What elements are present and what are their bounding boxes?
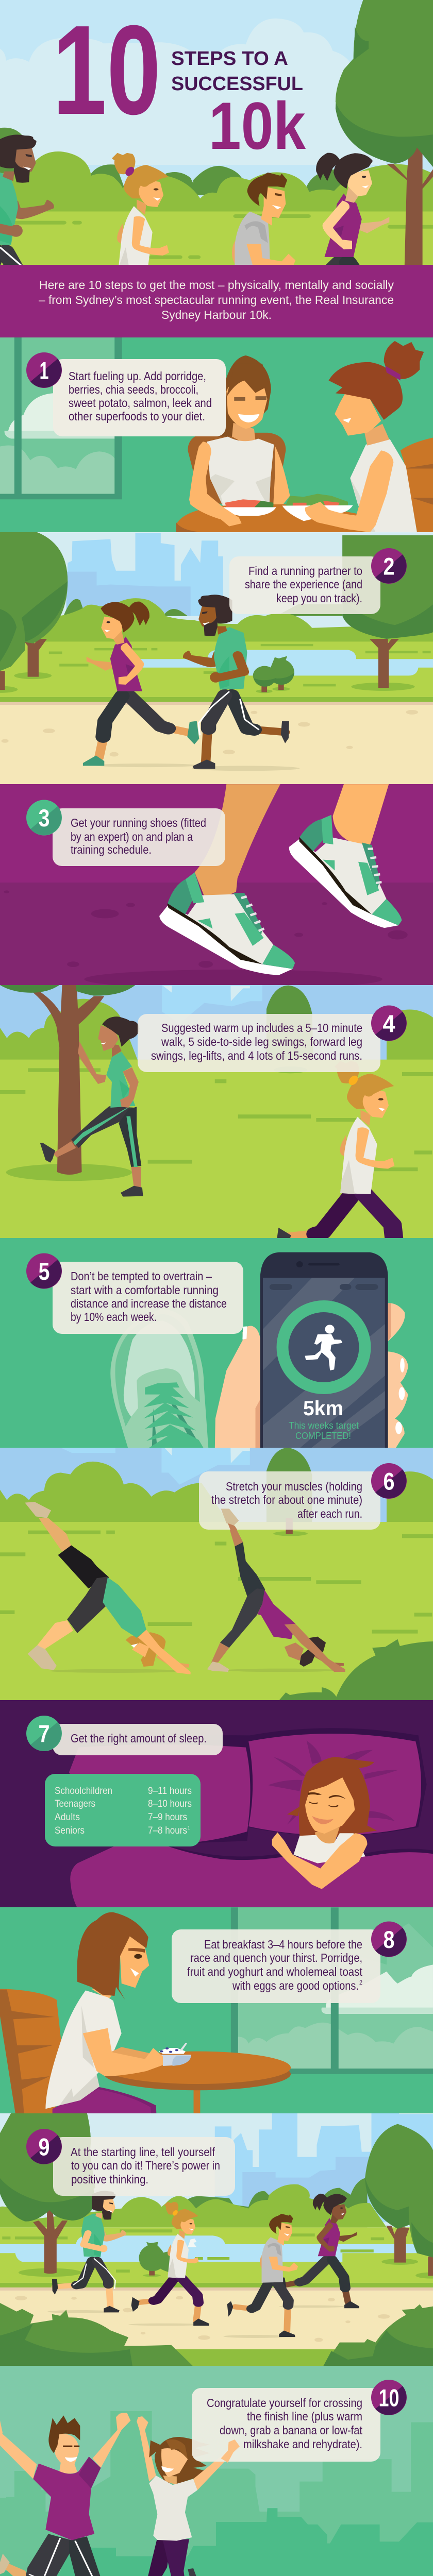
badge: 6 xyxy=(371,1463,407,1499)
table: sleep hours: Seniors xyxy=(55,1825,85,1836)
icon: small bushes xyxy=(139,2242,174,2277)
progress ring xyxy=(282,1307,365,1388)
runner: blonde woman xyxy=(131,2202,209,2326)
badge: 8 xyxy=(371,1922,407,1957)
callout: step 4: swings, leg-lifts, and 4 lots of 15-second runs. xyxy=(151,1049,362,1062)
callout: step 2: share the experience (and xyxy=(245,578,362,591)
callout: step 7 xyxy=(53,1724,223,1755)
table: sleep hours xyxy=(45,1774,201,1846)
panel: step 6 stretching xyxy=(0,1448,433,1701)
icon: right tree xyxy=(342,535,433,691)
illustration: two women eating xyxy=(176,341,433,532)
title: big 10: 10 xyxy=(53,0,161,141)
callout: step 4: walk, 5 side-to-side leg swings, forward leg xyxy=(161,1035,362,1048)
panel: step 1 fuel up xyxy=(0,337,433,532)
callout: step 2 xyxy=(229,556,380,614)
illustration: woman at breakfast table xyxy=(0,1912,291,2124)
callout: step 5: start with a comfortable running xyxy=(71,1283,219,1297)
callout: step 9: At the starting line, tell yourself xyxy=(71,2145,215,2159)
callout: step 8: Eat breakfast 3–4 hours before the xyxy=(204,1938,362,1951)
person: jumping man xyxy=(0,2413,130,2576)
shadows on path xyxy=(95,764,299,771)
callout: step 9: positive thinking. xyxy=(71,2173,148,2186)
table: sleep hours: Teenagers xyxy=(55,1799,95,1809)
illustration: phone xyxy=(260,1252,388,1449)
table: sleep hours: 7–9 hours xyxy=(148,1812,187,1823)
callout: step 4: Suggested warm up includes a 5–10 minute xyxy=(161,1021,362,1035)
panel: intro band xyxy=(0,265,433,337)
city skyline and park xyxy=(37,532,433,642)
illustration: hand holding phone xyxy=(215,1303,408,1449)
callout: step 9: to you can do it! There’s power in xyxy=(71,2159,220,2172)
callout: step 1: Start fueling up. Add porridge, xyxy=(69,369,206,383)
callout: step 1: berries, chia seeds, broccoli, xyxy=(69,383,198,396)
callout: step 10: down, grab a banana or low-fat xyxy=(220,2424,363,2437)
badge: 1: 1 xyxy=(39,357,48,384)
window with clouds xyxy=(0,337,122,499)
callout: step 8: fruit and yoghurt and wholemeal toast xyxy=(187,1965,363,1978)
badge: 5 xyxy=(26,1253,62,1289)
icon: swan xyxy=(188,2239,196,2247)
title: 10k: 10k xyxy=(209,88,306,163)
callout: step 5: Don’t be tempted to overtrain – xyxy=(71,1269,212,1283)
badge: 6: 6 xyxy=(384,1467,395,1495)
callout: step 1 xyxy=(53,359,226,436)
callout: step 6: after each run. xyxy=(297,1507,362,1520)
icon: large tree xyxy=(336,0,433,265)
intro text: Here are 10 steps to get the most – physically, mentally and socially xyxy=(39,278,394,292)
badge: 4 xyxy=(371,1006,407,1041)
panel: hero header xyxy=(0,0,433,265)
park background xyxy=(0,2113,433,2366)
ground texture xyxy=(4,890,408,989)
illustration: shoe from above xyxy=(110,1310,208,1449)
table: sleep hours: 1 xyxy=(188,1825,190,1831)
panel: step 7 sleep xyxy=(0,1700,433,1908)
icon: small bushes xyxy=(253,656,294,693)
intro text: – from Sydney’s most spectacular running event, the Real Insurance xyxy=(39,293,394,307)
runner: woman in purple xyxy=(316,152,390,265)
badge: 7: 7 xyxy=(38,1720,49,1748)
runner: man in grey xyxy=(232,172,296,265)
callout: step 10: Congratulate yourself for crossing xyxy=(207,2396,362,2410)
runner: bearded man xyxy=(0,134,54,265)
badge: 2 xyxy=(371,548,407,584)
intro text xyxy=(39,278,394,321)
callout: step 2: Find a running partner to xyxy=(248,564,362,578)
callout: step 10: the finish line (plus warm xyxy=(247,2410,362,2423)
runner: bearded man xyxy=(52,2191,126,2312)
runner: man in grey xyxy=(227,2214,298,2337)
callout: step 8: race and quench your thirst. Porridge, xyxy=(190,1951,362,1964)
callout: step 3: by an expert) on and plan a xyxy=(71,830,193,843)
badge: 2: 2 xyxy=(384,552,395,580)
panel: step 10 celebrate xyxy=(0,2366,433,2576)
panel: step 2 running partner xyxy=(0,531,433,784)
callout: step 1: sweet potato, salmon, leek and xyxy=(69,396,212,410)
badge: 10 xyxy=(371,2380,407,2415)
illustration: bed and sleeping woman xyxy=(69,1728,433,1908)
illustration: legs and running shoes xyxy=(159,784,423,975)
callout: step 5: distance and increase the distance xyxy=(71,1297,227,1310)
text: target: This weeks target xyxy=(289,1420,359,1431)
badge: 1 xyxy=(26,352,62,388)
table: sleep hours: 9–11 hours xyxy=(148,1786,192,1797)
panel: step 9 starting line xyxy=(0,2113,433,2366)
callout: step 3: training schedule. xyxy=(71,843,152,856)
badge: 9: 9 xyxy=(38,2133,49,2161)
callout: step 8: 2 xyxy=(359,1979,362,1986)
callout: step 5 xyxy=(53,1262,243,1334)
title: steps to a: STEPS TO A xyxy=(171,48,288,70)
callout: step 3 xyxy=(53,808,225,866)
panel: step 3 running shoes xyxy=(0,784,433,989)
icon: left trees xyxy=(0,531,68,693)
ground and path xyxy=(0,639,433,784)
badge: 9 xyxy=(26,2129,62,2164)
badge: 5: 5 xyxy=(38,1258,49,1285)
callout: step 2: keep you on track). xyxy=(276,591,362,605)
badge: 4: 4 xyxy=(382,1010,395,1037)
callout: step 6: Stretch your muscles (holding xyxy=(226,1480,362,1493)
runner: man xyxy=(183,595,289,769)
text: completed: COMPLETED! xyxy=(295,1431,351,1441)
window with clouds xyxy=(231,1907,433,2074)
callout: step 9 xyxy=(53,2137,235,2196)
callout: step 3: Get your running shoes (fitted xyxy=(71,816,206,829)
callout: step 8: with eggs are good options. xyxy=(232,1979,359,1992)
panel: step 4 warm up xyxy=(0,985,433,1238)
icon: right trees xyxy=(365,2124,433,2279)
callout: step 1: other superfoods to your diet. xyxy=(69,410,205,423)
person: jumping woman xyxy=(137,2416,240,2576)
table: sleep hours: 7–8 hours xyxy=(148,1825,187,1836)
intro text: Sydney Harbour 10k. xyxy=(161,308,272,321)
callout: step 8 xyxy=(172,1929,380,2003)
icon: tree xyxy=(0,985,135,1175)
woman's raised hand over callout xyxy=(221,2439,240,2463)
icon: runner xyxy=(305,1325,342,1370)
raised foot over callout xyxy=(221,1509,239,1530)
panel: step 8 breakfast xyxy=(0,1907,433,2124)
skyline xyxy=(0,2411,433,2576)
runner: woman in purple xyxy=(278,2194,359,2308)
runner: woman xyxy=(83,602,199,766)
foreground bushes xyxy=(0,2303,433,2366)
park background xyxy=(0,1448,433,1701)
person: woman stretching against tree xyxy=(40,1016,143,1197)
panel: step 5 don't overtrain xyxy=(0,1238,433,1449)
table: sleep hours: Schoolchildren xyxy=(55,1786,112,1797)
callout: step 6: the stretch for about one minute) xyxy=(211,1493,362,1506)
text: 5km: 5km xyxy=(303,1397,343,1420)
person: blonde runner xyxy=(277,1072,403,1238)
title: successful: SUCCESSFUL xyxy=(171,73,303,95)
badge: 7 xyxy=(26,1716,62,1751)
callout: step 4 xyxy=(138,1014,380,1072)
icon: left tree xyxy=(0,2113,95,2277)
person: woman in downward dog xyxy=(207,1509,345,1672)
badge: 8: 8 xyxy=(384,1926,395,1953)
callout: step 10 xyxy=(192,2388,380,2462)
callout: step 10: milkshake and rehydrate). xyxy=(243,2437,362,2451)
badge: 3 xyxy=(26,800,62,836)
runner: blonde woman xyxy=(112,152,169,265)
table: sleep hours: Adults xyxy=(55,1812,80,1823)
callout: step 5: by 10% each week. xyxy=(71,1310,157,1324)
callout: step 6 xyxy=(199,1471,380,1530)
badge: 3: 3 xyxy=(38,804,49,832)
hero park scene xyxy=(0,0,433,265)
park background xyxy=(0,985,433,1238)
table: sleep hours: 8–10 hours xyxy=(148,1799,192,1809)
person: man in downward dog xyxy=(25,1502,191,1674)
callout: step 7: Get the right amount of sleep. xyxy=(71,1732,207,1745)
badge: 10: 10 xyxy=(378,2384,399,2411)
